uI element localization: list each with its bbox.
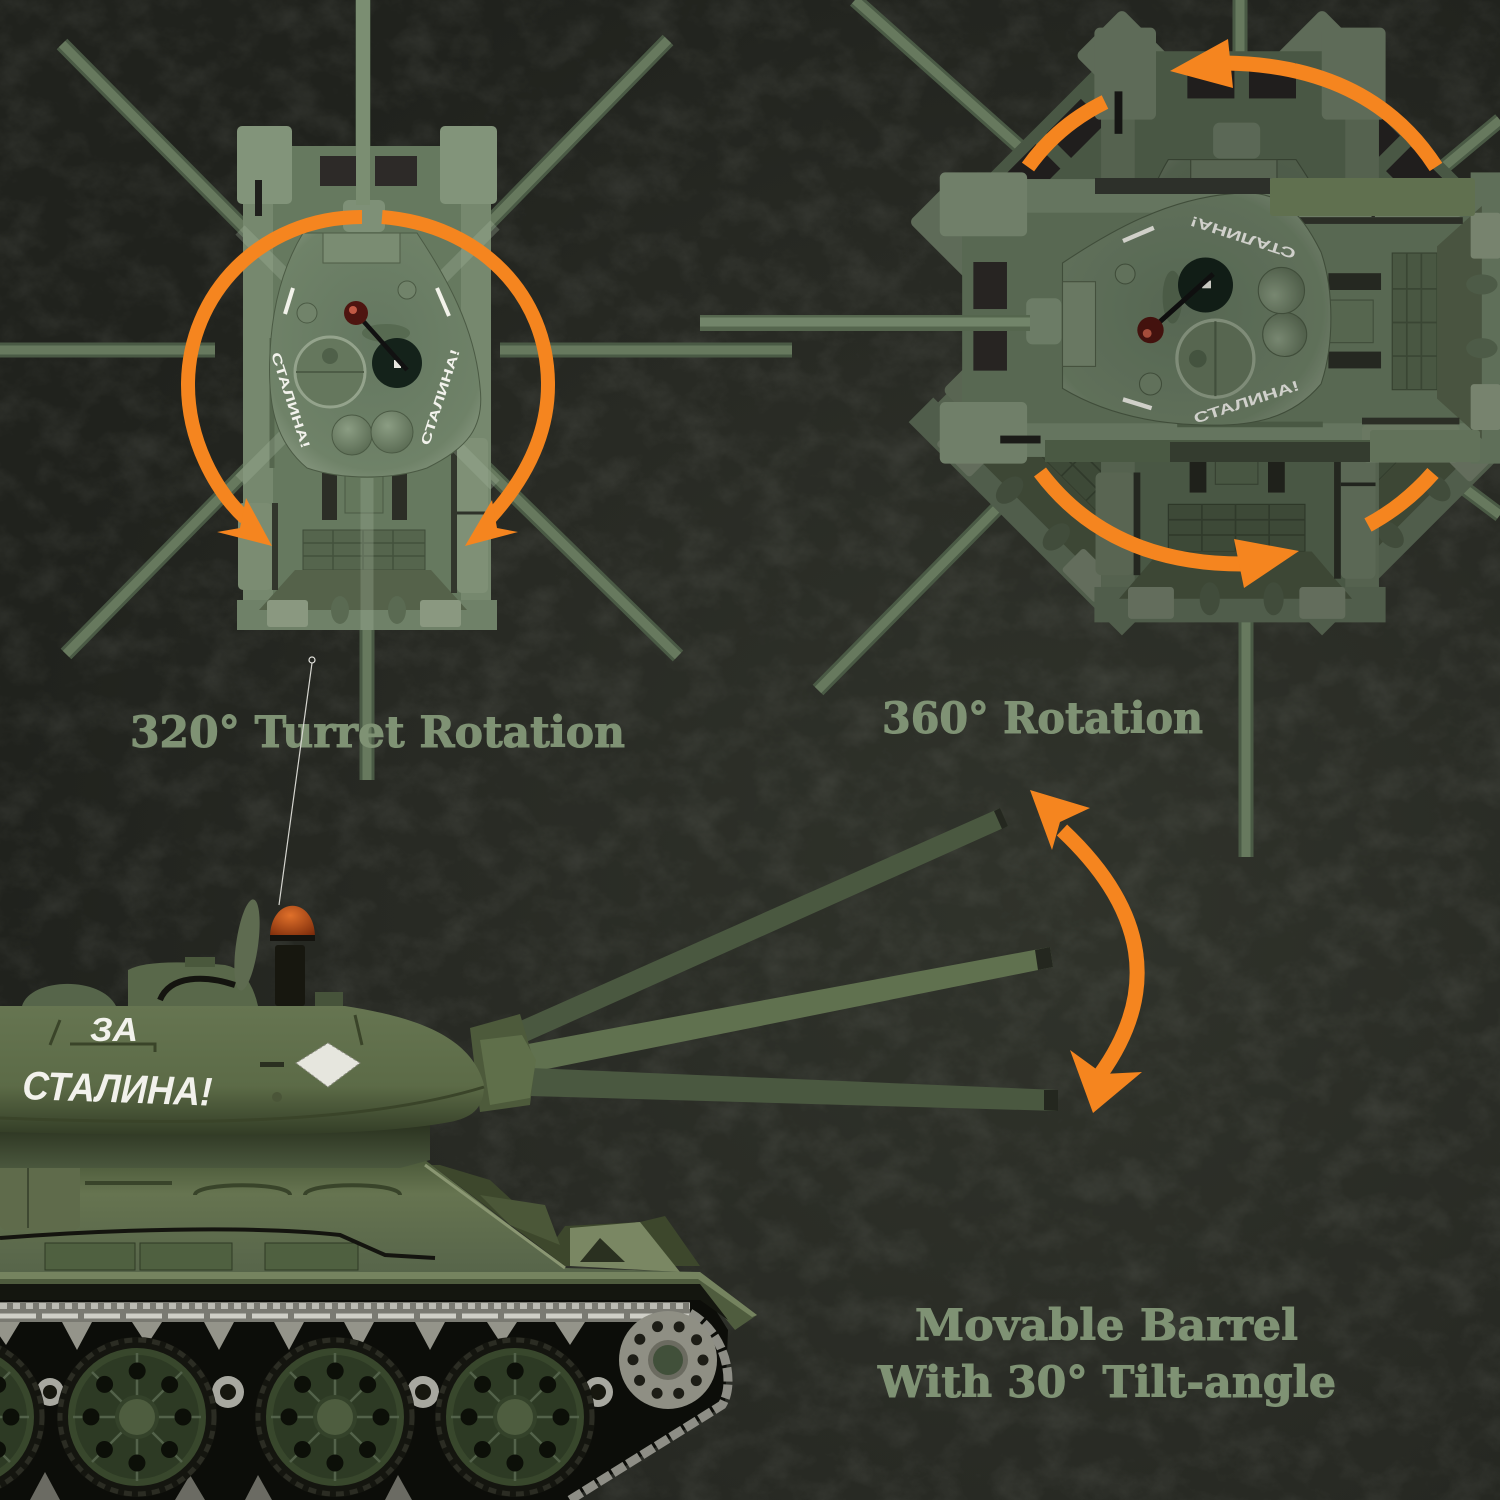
turret seen from above: [268, 200, 481, 477]
barrel sweep behind the hull: [0, 0, 792, 780]
barrel pointing up: [356, 0, 370, 205]
orange arrow: bottom: [1040, 472, 1299, 588]
main gun barrel: [700, 322, 1030, 323]
amber beacon light: [270, 906, 343, 1006]
heading: 360 rotation: 360° Rotation: [882, 694, 1203, 744]
road wheels: [0, 1337, 595, 1497]
turret marking: diamond emblem: [296, 1043, 360, 1087]
heading: movable barrel, line one and two: With 30° Tilt-angle: [877, 1358, 1336, 1408]
turret body: [0, 1006, 484, 1135]
running gear dark interior: [0, 1285, 728, 1500]
heading: 320 turret rotation: 320° Turret Rotation: [130, 708, 625, 758]
orange arc: lower right segment: [1368, 473, 1433, 525]
three barrel tilt positions: [518, 808, 1058, 1111]
hull side stowage on the main tank: [1045, 178, 1480, 462]
orange rotation arrow: left: [188, 217, 362, 546]
top-left tank: 320 degree turret rotation view: [0, 0, 792, 780]
spare track links: [45, 1243, 358, 1270]
front idler wheel: [619, 1311, 717, 1409]
orange arc: upper left segment: [1028, 102, 1105, 167]
turret ring: [0, 1125, 430, 1168]
heading: movable barrel, line one and two: Movable Barrel: [915, 1301, 1298, 1351]
top-right tank: 360 degree hull rotation view: [700, 0, 1500, 857]
antenna: [279, 657, 315, 905]
orange arrow: top: [1170, 39, 1436, 167]
translucent barrel ghosts over the hull: [240, 225, 495, 630]
turret marking: Stalina: СТАЛИНА!: [22, 1064, 213, 1115]
track teeth: [0, 1322, 585, 1500]
heading: movable barrel, line one and two: [877, 1301, 1336, 1408]
orange double-headed arrow for barrel tilt: [1030, 790, 1142, 1113]
hull seen from above: [237, 126, 497, 630]
main hull and turret, pointing left: [940, 172, 1500, 464]
return rollers: [36, 1376, 613, 1408]
lower hull skirt and fender: [0, 1272, 757, 1330]
orange rotation arrow: right: [382, 217, 548, 546]
mantlet behind turret: [470, 1014, 535, 1112]
fuel drum: [0, 1155, 80, 1230]
turret marking: Za: ЗА: [90, 1011, 138, 1048]
side-view tank with tilting barrel: [0, 808, 1058, 1500]
upper track run: [0, 1306, 728, 1500]
upper hull with sloped glacis: [0, 1160, 700, 1272]
barrel sweep around the hull: [818, 0, 1500, 857]
turret fittings: [0, 1015, 484, 1122]
rotated ghost hulls: [909, 9, 1500, 635]
cupola and dome: [22, 898, 264, 1006]
cable: [0, 1229, 435, 1258]
